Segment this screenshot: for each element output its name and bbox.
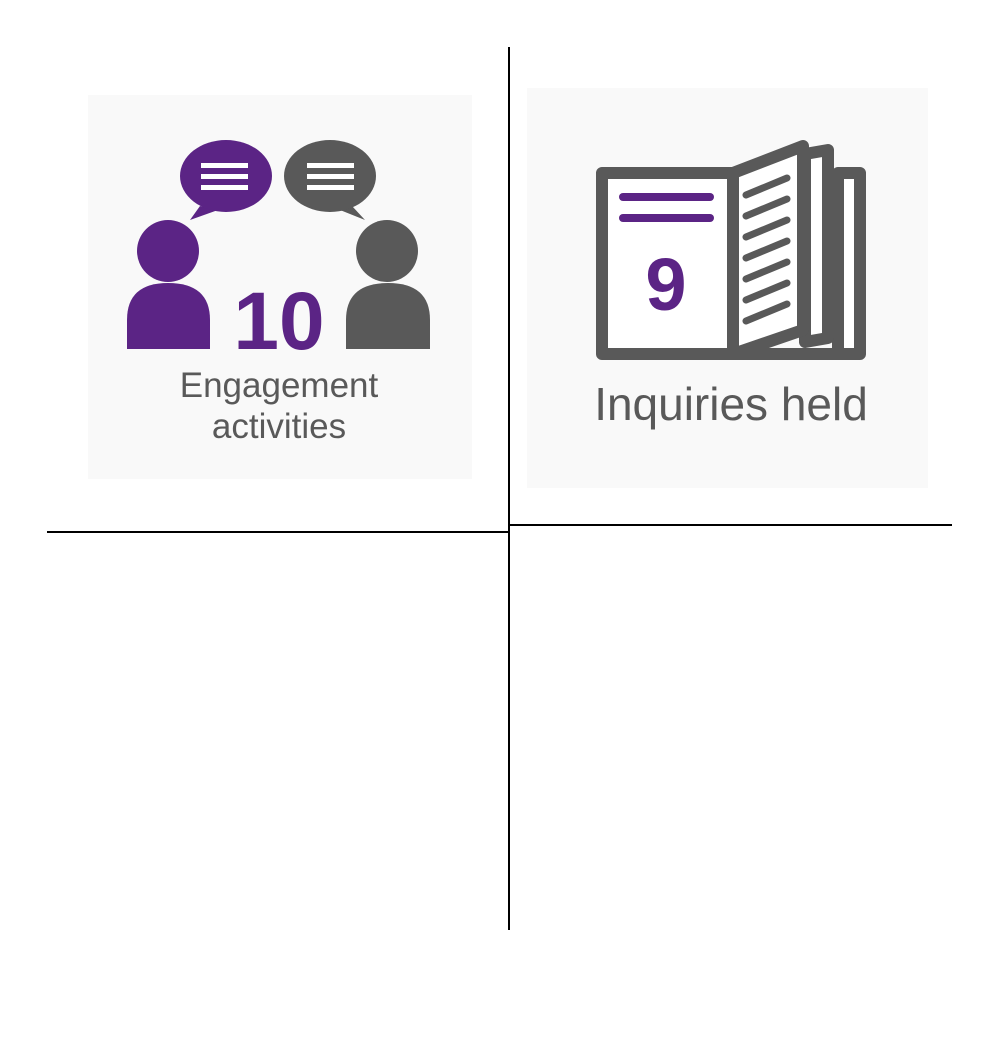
label: Engagement activities: activities [212,407,346,446]
icon: purple speech bubble [180,140,272,220]
icon: purple person [127,220,210,349]
panel: inquiries held [527,88,928,488]
label: Inquiries held: Inquiries held [594,378,868,430]
number: 10: 10 [233,276,325,367]
panel: engagement activities [88,95,472,479]
label: Engagement activities: Engagement [180,366,378,405]
icon: open book [602,146,860,354]
icon: gray speech bubble [284,140,376,220]
icon: gray person [346,220,430,349]
number: 9: 9 [645,243,687,326]
